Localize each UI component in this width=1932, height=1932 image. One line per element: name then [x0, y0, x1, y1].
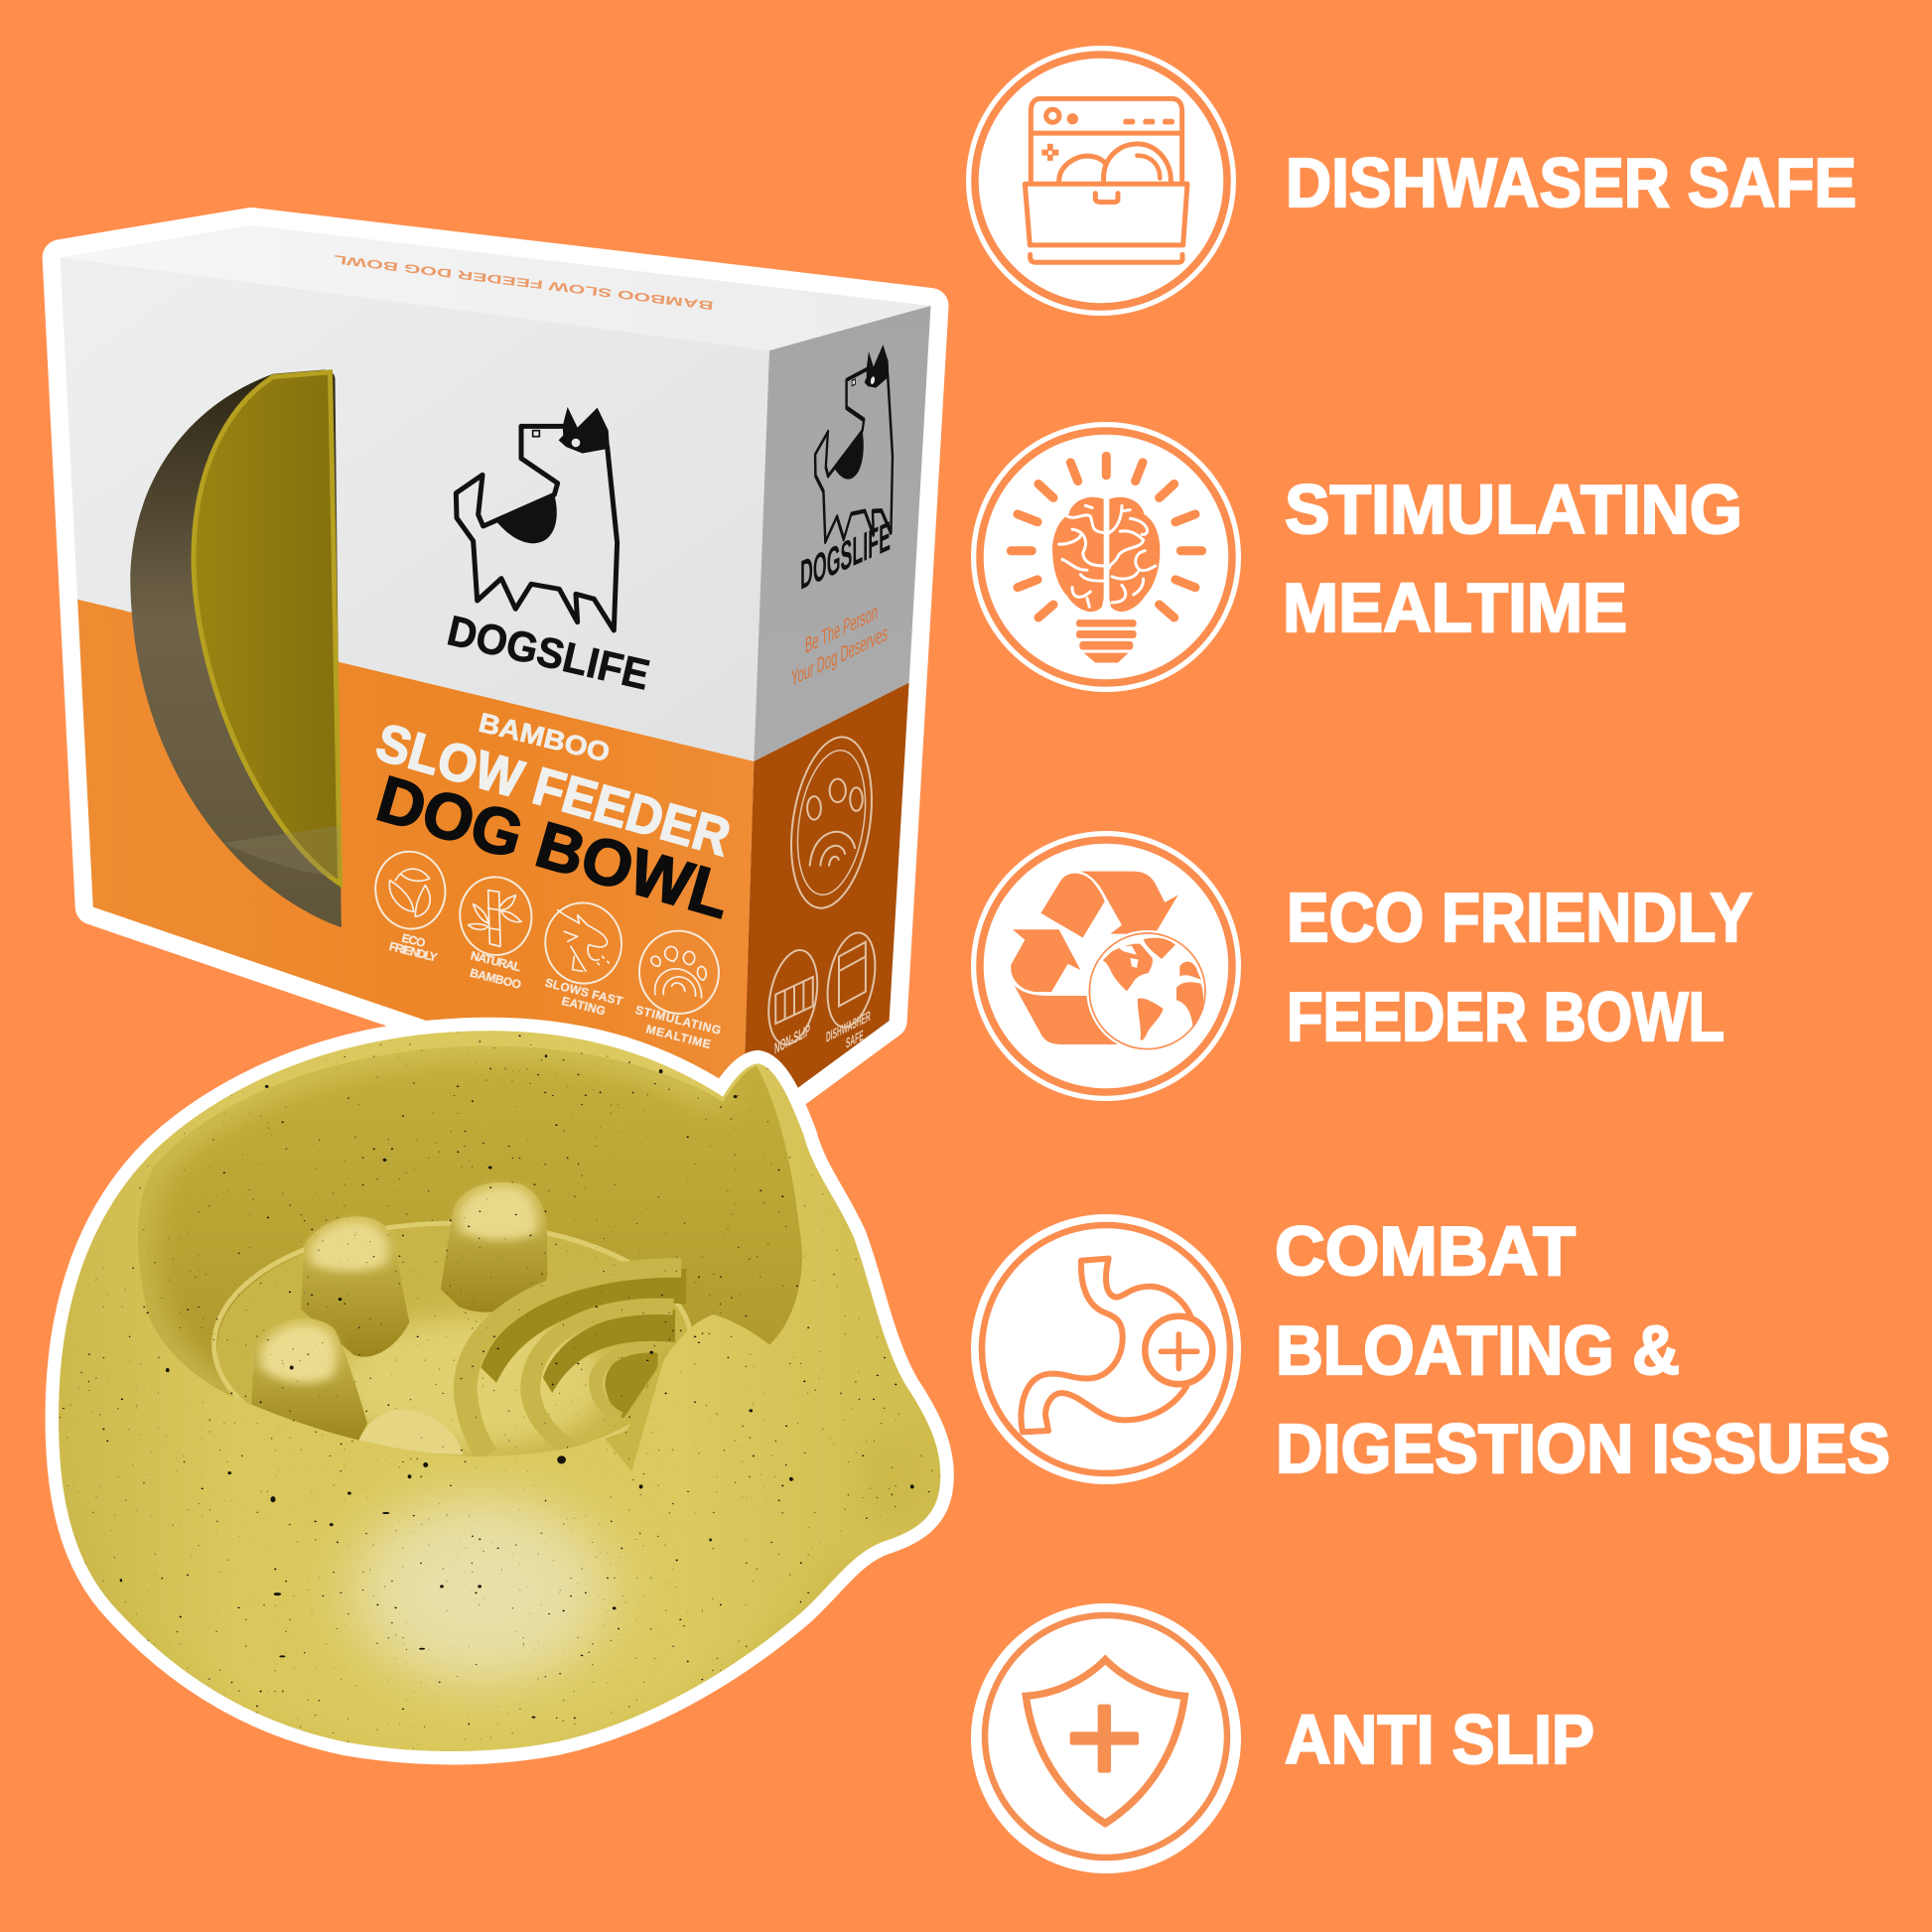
label: combat bloating and digestion issues	[1275, 1212, 1890, 1487]
badge: slows fast eating: SLOWS FAST	[544, 976, 624, 1009]
badge: natural bamboo: BAMBOO	[469, 966, 522, 992]
badge: natural bamboo: NATURAL	[470, 948, 522, 974]
rainbow ridge 1	[466, 1268, 681, 1454]
icon: stomach	[971, 1214, 1241, 1484]
box side grey panel	[754, 306, 931, 761]
bowl outer shading	[38, 1024, 955, 1783]
box front white panel	[61, 257, 769, 761]
label: eco friendly feeder bowl: ECO FRIENDLY	[1287, 879, 1752, 956]
icon: brain light bulb	[971, 422, 1241, 692]
back left peg	[301, 1216, 409, 1357]
dog mark	[456, 407, 618, 630]
badge disc	[966, 46, 1236, 316]
box side dark orange panel	[743, 683, 909, 1129]
globe	[1086, 930, 1208, 1052]
badge: stimulating mealtime: STIMULATING	[634, 1003, 723, 1037]
brand name: DOGSLIFE	[443, 607, 654, 700]
label: stimulating mealtime: MEALTIME	[1283, 569, 1627, 646]
badge: slows fast eating	[540, 897, 626, 1018]
well floor	[217, 1226, 695, 1469]
rainbow ridge 3 wall	[605, 1347, 657, 1419]
label: combat bloating and digestion issues: DIGESTION ISSUES	[1276, 1410, 1890, 1487]
side logo mark	[815, 339, 893, 573]
label: combat bloating and digestion issues: COMBAT	[1275, 1212, 1576, 1290]
label: stimulating mealtime	[1283, 471, 1742, 646]
spout crease	[606, 1360, 663, 1471]
badge ring	[980, 431, 1232, 683]
bulb base	[1076, 620, 1137, 627]
badge disc	[971, 1603, 1241, 1873]
label: eco friendly feeder bowl	[1287, 879, 1752, 1055]
brain folds	[1059, 505, 1156, 607]
side panel anti slip badge	[761, 946, 824, 1048]
side brand name: DOGSLIFE	[800, 512, 891, 599]
side tagline line 2: Your Dog Deserves	[791, 621, 888, 691]
bowl white outline	[59, 1031, 940, 1751]
icon: dishwasher	[966, 46, 1236, 316]
dishwasher drawing	[1025, 98, 1187, 262]
badge: eco friendly: FRIENDLY	[388, 939, 439, 964]
badge: eco friendly	[370, 847, 450, 964]
box front orange panel	[77, 600, 754, 1129]
slow feeder words: SLOW FEEDER	[370, 713, 737, 868]
front small peg	[358, 1410, 463, 1454]
badge ring	[980, 840, 1232, 1092]
side safe label: SAFE	[846, 1028, 864, 1052]
box white outline	[61, 225, 931, 1129]
label: dishwasher safe: DISHWASER SAFE	[1286, 144, 1857, 221]
side panel bowl drawing	[780, 732, 883, 913]
recycle arrows	[1011, 872, 1178, 1044]
yellow slow feeder bowl	[38, 1024, 955, 1783]
well lip glow	[138, 1046, 723, 1406]
icon: shield	[971, 1603, 1241, 1873]
rainbow ridge 3	[596, 1347, 659, 1418]
box top face	[61, 225, 931, 350]
shield drawing	[1026, 1660, 1184, 1824]
product box	[61, 225, 931, 1129]
bowl body	[59, 1031, 940, 1751]
badge: slows fast eating: EATING	[560, 994, 607, 1018]
label: anti slip: ANTI SLIP	[1285, 1701, 1594, 1778]
box window opening	[130, 370, 342, 927]
front product title and badges	[369, 707, 739, 1051]
icon: recycle and globe	[971, 831, 1241, 1101]
rainbow ridge 2	[530, 1307, 673, 1449]
large speckles	[120, 1054, 914, 1719]
side panel dishwasher badge	[820, 929, 883, 1031]
badge ring	[982, 1225, 1230, 1473]
bamboo word: BAMBOO	[476, 707, 613, 767]
lighter floor seen in window	[223, 825, 340, 878]
label: stimulating mealtime: STIMULATING	[1285, 471, 1742, 548]
dog bowl words: DOG BOWL	[369, 761, 739, 932]
badge: eco friendly: ECO	[400, 931, 427, 950]
rays	[1011, 456, 1202, 618]
badge disc	[971, 831, 1241, 1101]
right lobe shade	[882, 1461, 898, 1497]
well floor ring	[214, 1223, 692, 1466]
box geometry: panels	[61, 225, 931, 1129]
front highlight	[353, 1497, 608, 1684]
badge: stimulating mealtime	[634, 925, 724, 1051]
badge disc	[971, 422, 1241, 692]
well wall	[111, 1038, 819, 1463]
label: combat bloating and digestion issues: BLOATING &	[1276, 1311, 1680, 1389]
rainbow ridge 1 wall	[481, 1269, 686, 1383]
lower edge shade	[75, 1541, 849, 1737]
speckle texture	[38, 1024, 955, 1763]
side badge labels: NON-SLIP	[774, 1020, 810, 1058]
stomach drawing	[1021, 1259, 1212, 1432]
badge: stimulating mealtime: MEALTIME	[644, 1022, 712, 1051]
bulb drawing	[1011, 456, 1202, 663]
side tagline line 1: Be The Person	[805, 599, 878, 658]
badge ring	[975, 55, 1227, 307]
rainbow ridge 2 wall	[543, 1310, 675, 1393]
floor centre	[336, 1317, 608, 1449]
front left peg	[251, 1318, 367, 1444]
brain	[1052, 497, 1160, 612]
front logo	[443, 407, 654, 700]
badge: natural bamboo	[455, 873, 536, 992]
box top mirrored label: BAMBOO SLOW FEEDER DOG BOWL	[334, 252, 714, 313]
bowl seen through window	[194, 372, 340, 884]
back right peg	[441, 1182, 547, 1312]
badge disc	[971, 1214, 1241, 1484]
side dishwasher label: DISHWASHER	[826, 1008, 871, 1046]
badge ring	[985, 1615, 1227, 1858]
well interior	[138, 1046, 802, 1456]
label: eco friendly feeder bowl: FEEDER BOWL	[1287, 978, 1725, 1055]
